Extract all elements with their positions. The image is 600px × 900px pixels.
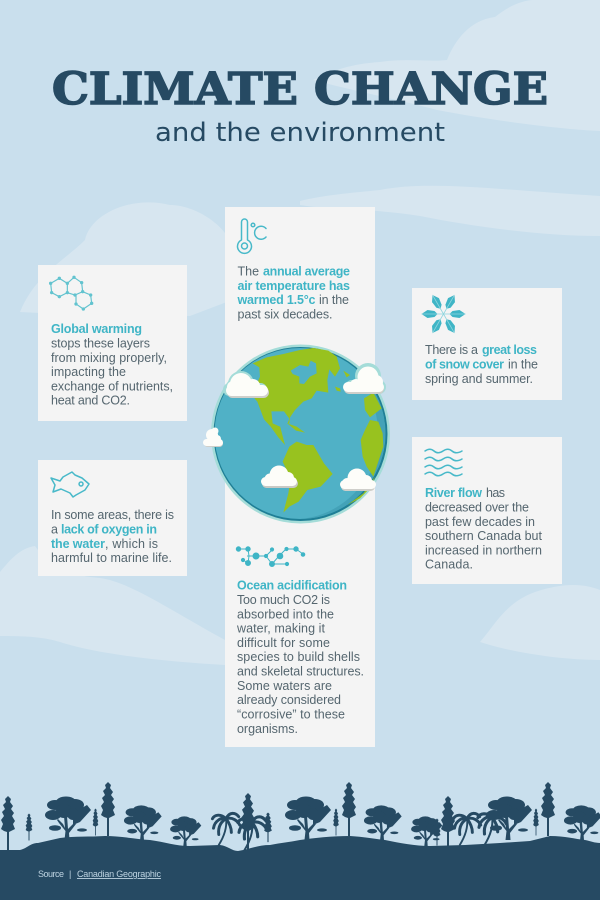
- panel: snow cover: [412, 288, 562, 400]
- text: lack of oxygen: harmful to marine life.: [51, 551, 172, 565]
- text: snow cover: There is a: [425, 343, 478, 357]
- background clouds: [0, 0, 600, 665]
- text: snow cover: [425, 343, 538, 386]
- text: global warming: Global warming: [51, 322, 142, 336]
- land: rim and islands: [287, 371, 375, 505]
- text: air temperature: in the: [319, 293, 349, 307]
- land: africa: [361, 420, 383, 477]
- text: lack of oxygen: In some areas, there is: [51, 508, 174, 522]
- icon: thermometer: [238, 219, 266, 253]
- text: river flow: southern Canada but: [425, 529, 543, 543]
- icon: snowflake: [422, 293, 466, 335]
- text: air temperature: annual average: [263, 264, 350, 278]
- text: river flow: past few decades in: [425, 515, 535, 529]
- land: south america: [283, 442, 333, 513]
- panel: river flow: [412, 437, 562, 584]
- text: lack of oxygen: the water: [51, 537, 105, 551]
- source line: Source: [38, 869, 64, 879]
- icon: waves: [425, 449, 462, 476]
- text: global warming: [51, 322, 173, 408]
- text: snow cover: of snow cover: [425, 358, 504, 372]
- land: north america: [252, 348, 340, 445]
- text: ocean acidification: Too much CO2 is: [237, 593, 330, 607]
- text: ocean acidification: already considered: [237, 693, 341, 707]
- text: river flow: increased in northern: [425, 544, 542, 558]
- text: lack of oxygen: a: [51, 522, 58, 536]
- text: ocean acidification: water, making it: [236, 622, 326, 636]
- text: ocean acidification: “corrosive” to these: [237, 708, 345, 722]
- globe: [203, 344, 390, 524]
- icon: molecule chain: [236, 547, 305, 566]
- gulf of mexico: [271, 411, 289, 427]
- cloud: upper left: [223, 371, 269, 398]
- ground: [0, 836, 600, 900]
- cloud: lower centre: [261, 466, 298, 488]
- text: river flow: decreased over the: [425, 500, 529, 514]
- text: lack of oxygen: lack of oxygen in: [61, 522, 157, 536]
- hudson bay: [291, 361, 317, 384]
- text: snow cover: spring and summer.: [425, 372, 533, 386]
- text: river flow: [425, 486, 543, 572]
- source line: |: [69, 869, 71, 879]
- text: lack of oxygen: [51, 508, 174, 565]
- text: air temperature: The: [238, 264, 259, 278]
- text: ocean acidification: Ocean acidification: [237, 578, 347, 592]
- icon: fish: [51, 472, 89, 497]
- source line: [38, 869, 162, 879]
- source line: Canadian Geographic: [77, 869, 162, 879]
- text: river flow: River flow: [425, 486, 482, 500]
- text: air temperature: past six decades.: [238, 308, 332, 322]
- cloud: upper right: [343, 363, 386, 394]
- text: ocean acidification: [236, 578, 364, 736]
- tree line silhouette: [0, 782, 600, 900]
- panel: centre column: [225, 207, 375, 747]
- text: ocean acidification: species to build shells: [237, 650, 360, 664]
- title: CLIMATE CHANGE: [52, 64, 548, 115]
- panel: lack of oxygen: [38, 460, 187, 576]
- text: ocean acidification: organisms.: [237, 722, 298, 736]
- text: air temperature: [236, 264, 350, 322]
- text: river flow: Canada.: [425, 558, 473, 572]
- text: air temperature: warmed 1.5°c: [236, 293, 316, 307]
- panel: global warming: [38, 265, 187, 421]
- text: global warming: stops these layers: [51, 336, 150, 350]
- text: global warming: exchange of nutrients,: [51, 380, 173, 394]
- subtitle: and the environment: [155, 118, 445, 148]
- text: air temperature: air temperature has: [238, 279, 350, 293]
- cloud: far left: [203, 428, 223, 447]
- text: ocean acidification: absorbed into the: [237, 608, 334, 622]
- text: snow cover: in the: [508, 358, 538, 372]
- text: ocean acidification: and skeletal structures.: [237, 664, 364, 678]
- land: europe: [364, 393, 382, 417]
- text: lack of oxygen: , which is: [105, 537, 158, 551]
- text: ocean acidification: Some waters are: [237, 679, 332, 693]
- text: river flow: has: [486, 486, 505, 500]
- icon: hexagon molecule: [49, 276, 93, 311]
- cloud: lower right: [340, 468, 376, 491]
- text: ocean acidification: difficult for some: [237, 636, 330, 650]
- text: global warming: from mixing properly,: [51, 351, 167, 365]
- text: global warming: heat and CO2.: [51, 394, 130, 408]
- text: snow cover: great loss: [482, 343, 537, 357]
- text: global warming: impacting the: [51, 365, 126, 379]
